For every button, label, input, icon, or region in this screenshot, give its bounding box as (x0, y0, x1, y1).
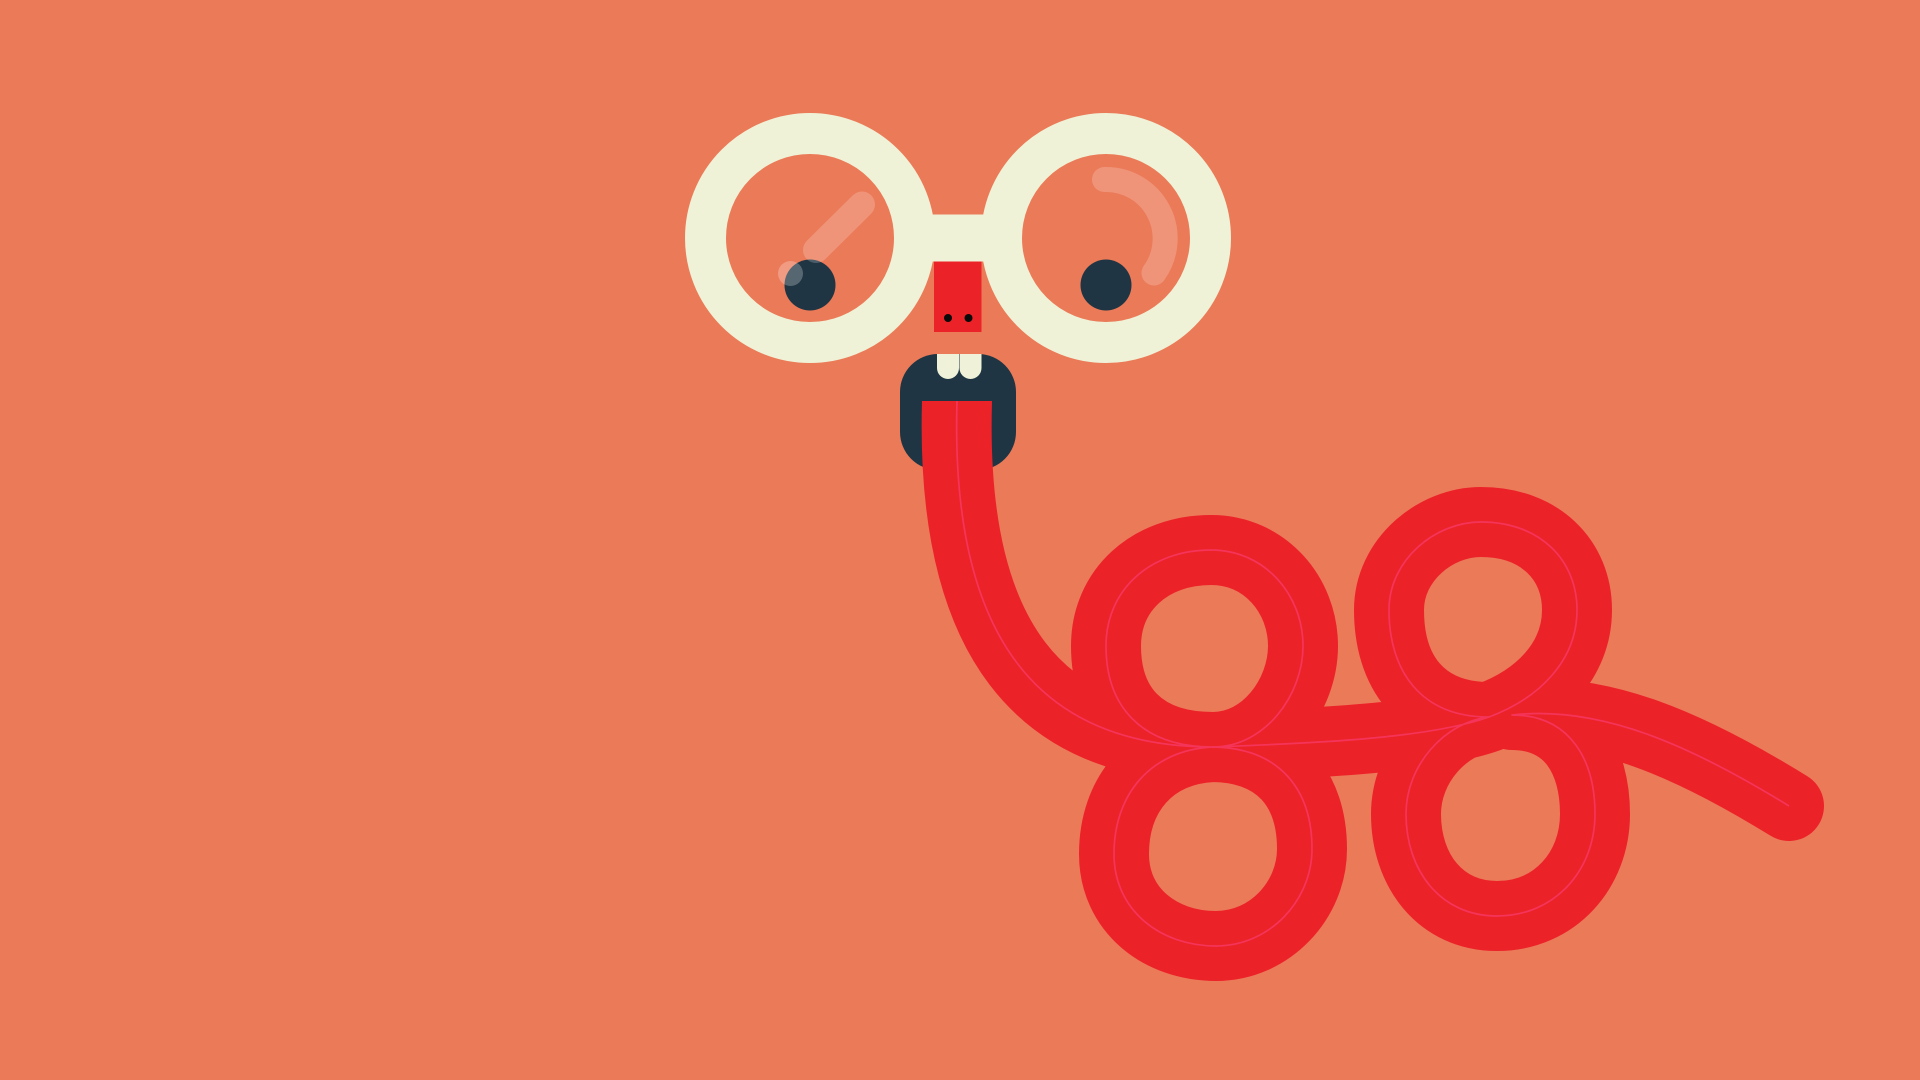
left lens glare dot (778, 261, 803, 286)
mouth (900, 354, 1016, 470)
nostrils (944, 314, 972, 322)
nose (934, 261, 982, 332)
tongue body loops (957, 395, 1789, 946)
left pupil (784, 260, 836, 310)
left lens rim (706, 134, 914, 342)
tongue (957, 395, 1789, 946)
right lens rim (1002, 134, 1210, 342)
glasses (706, 134, 1210, 342)
teeth (937, 354, 982, 379)
left lens glare stroke (816, 204, 862, 250)
illustration: face with glasses and looping tongue (685, 113, 1824, 981)
right lens glare arc (1104, 179, 1165, 273)
right pupil (1080, 260, 1132, 310)
bridge (925, 214, 991, 262)
tongue centre line (957, 395, 1789, 946)
